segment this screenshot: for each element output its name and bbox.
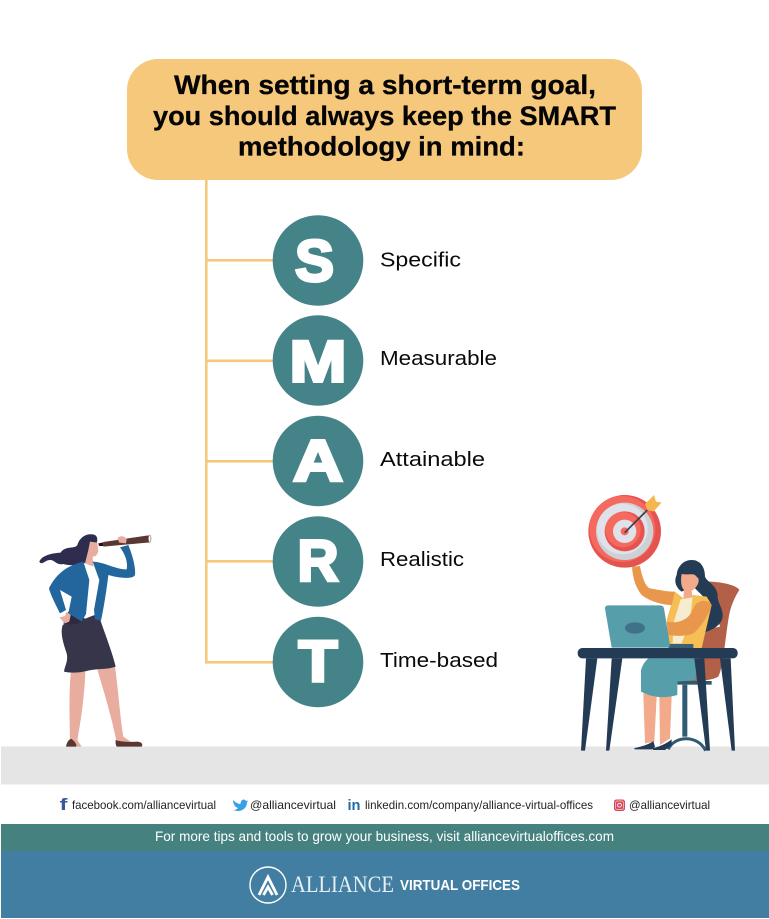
- item: M Measurable: [273, 315, 497, 406]
- footer logo band: VIRTUAL OFFICES: [400, 877, 520, 894]
- icon: facebook: f: [60, 795, 68, 814]
- item: S Specific: Specific: [380, 250, 461, 272]
- social links row: @alliancevirtual: [250, 798, 336, 812]
- social links row: @alliancevirtual: [629, 798, 710, 812]
- icon: desk: [578, 648, 738, 751]
- item: A Attainable: [273, 416, 485, 506]
- item: R Realistic: R: [298, 529, 338, 594]
- title panel: [127, 59, 642, 180]
- footer logo band: [1, 851, 769, 918]
- title panel: methodology in mind:: [238, 132, 525, 162]
- social links row: linkedin.com/company/alliance-virtual-offices: [365, 798, 593, 812]
- illustration: woman with spyglass: [39, 534, 151, 747]
- item: R Realistic: [273, 516, 464, 607]
- icon: twitter: [233, 800, 248, 811]
- illustration: woman at desk holding target: [578, 495, 739, 751]
- item: T Time-based: T: [298, 630, 338, 694]
- item: T Time-based: Time-based: [380, 650, 498, 672]
- social links row: facebook.com/alliancevirtual: [72, 798, 216, 812]
- title panel: you should always keep the SMART: [153, 101, 616, 131]
- item: S Specific: S: [295, 229, 334, 294]
- icon: target with arrow: [588, 495, 662, 568]
- icon: alliance logo: [250, 867, 286, 903]
- item: M Measurable: M: [290, 330, 346, 394]
- icon: laptop: [605, 605, 693, 648]
- footer logo band: ALLIANCE: [291, 872, 394, 897]
- footer tip band: For more tips and tools to grow your business, visit alliancevirtualoffices.com: [155, 828, 614, 844]
- item: R Realistic: Realistic: [380, 549, 464, 571]
- item: T Time-based: [273, 617, 498, 707]
- item: M Measurable: Measurable: [380, 348, 497, 370]
- item: A Attainable: Attainable: [380, 449, 485, 471]
- item: S Specific: [273, 215, 461, 306]
- title panel: When setting a short-term goal,: [174, 70, 596, 100]
- tree connector lines: [205, 178, 275, 664]
- item: A Attainable: A: [293, 429, 343, 494]
- footer tip band: [1, 824, 769, 851]
- icon: instagram: [614, 800, 625, 811]
- icon: chair: [668, 582, 739, 751]
- ground band: [1, 746, 769, 784]
- icon: linkedin: in: [348, 797, 360, 814]
- social links row: [60, 795, 710, 814]
